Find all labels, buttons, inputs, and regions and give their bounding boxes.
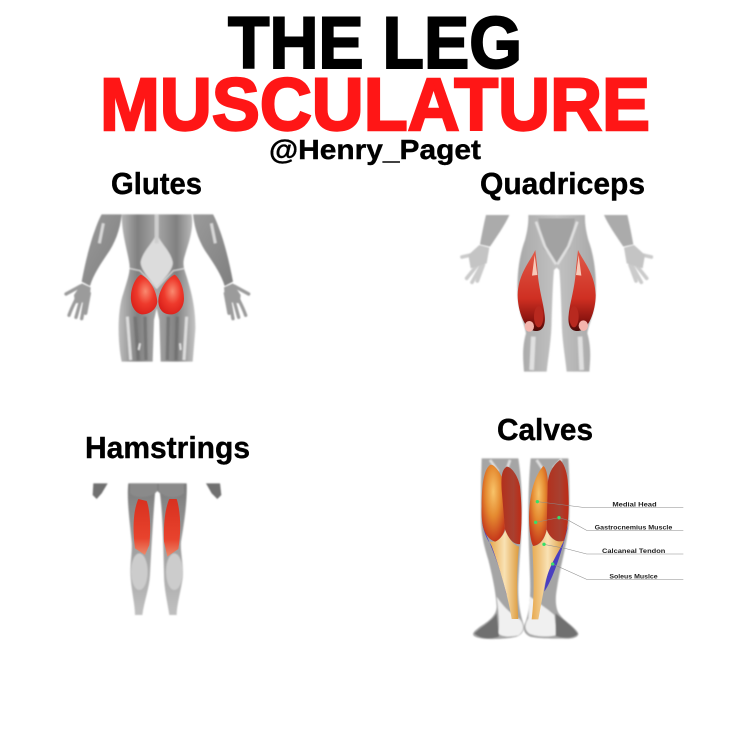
callout: Calcaneal Tendon: Calcaneal Tendon <box>602 548 665 555</box>
heading: Calves: Calves <box>497 412 593 447</box>
title: MUSCULATURE: MUSCULATURE <box>100 63 650 146</box>
figure: quadriceps <box>462 215 651 372</box>
heading: Hamstrings: Hamstrings <box>85 430 250 465</box>
callout: Gastrocnemius Muscle <box>534 516 683 531</box>
figure: hamstrings <box>93 483 221 615</box>
callout: Soleus Muscle: Soleus Muslce <box>609 573 658 580</box>
callout: Soleus Muscle <box>551 562 683 580</box>
hamstring muscles <box>134 499 180 557</box>
callout: Calcaneal Tendon <box>542 543 683 555</box>
callout: Medial Head <box>536 500 683 509</box>
body from front <box>462 215 651 372</box>
callout: Gastrocnemius Muscle: Gastrocnemius Muscle <box>595 524 673 531</box>
figure: calves <box>473 458 683 639</box>
heading: Quadriceps: Quadriceps <box>480 166 645 201</box>
quadriceps muscles <box>518 250 596 332</box>
callout: Medial Head: Medial Head <box>612 502 657 509</box>
glute muscles <box>131 275 184 314</box>
author handle: @Henry_Paget <box>269 134 481 165</box>
heading: Glutes: Glutes <box>111 166 202 201</box>
body from behind <box>66 214 249 362</box>
title: THE LEG: THE LEG <box>228 3 522 84</box>
figure: glutes <box>66 214 249 362</box>
right calf muscles <box>529 460 569 619</box>
left calf muscles <box>482 465 522 619</box>
body from behind <box>93 483 221 615</box>
lower legs and feet <box>473 458 578 639</box>
